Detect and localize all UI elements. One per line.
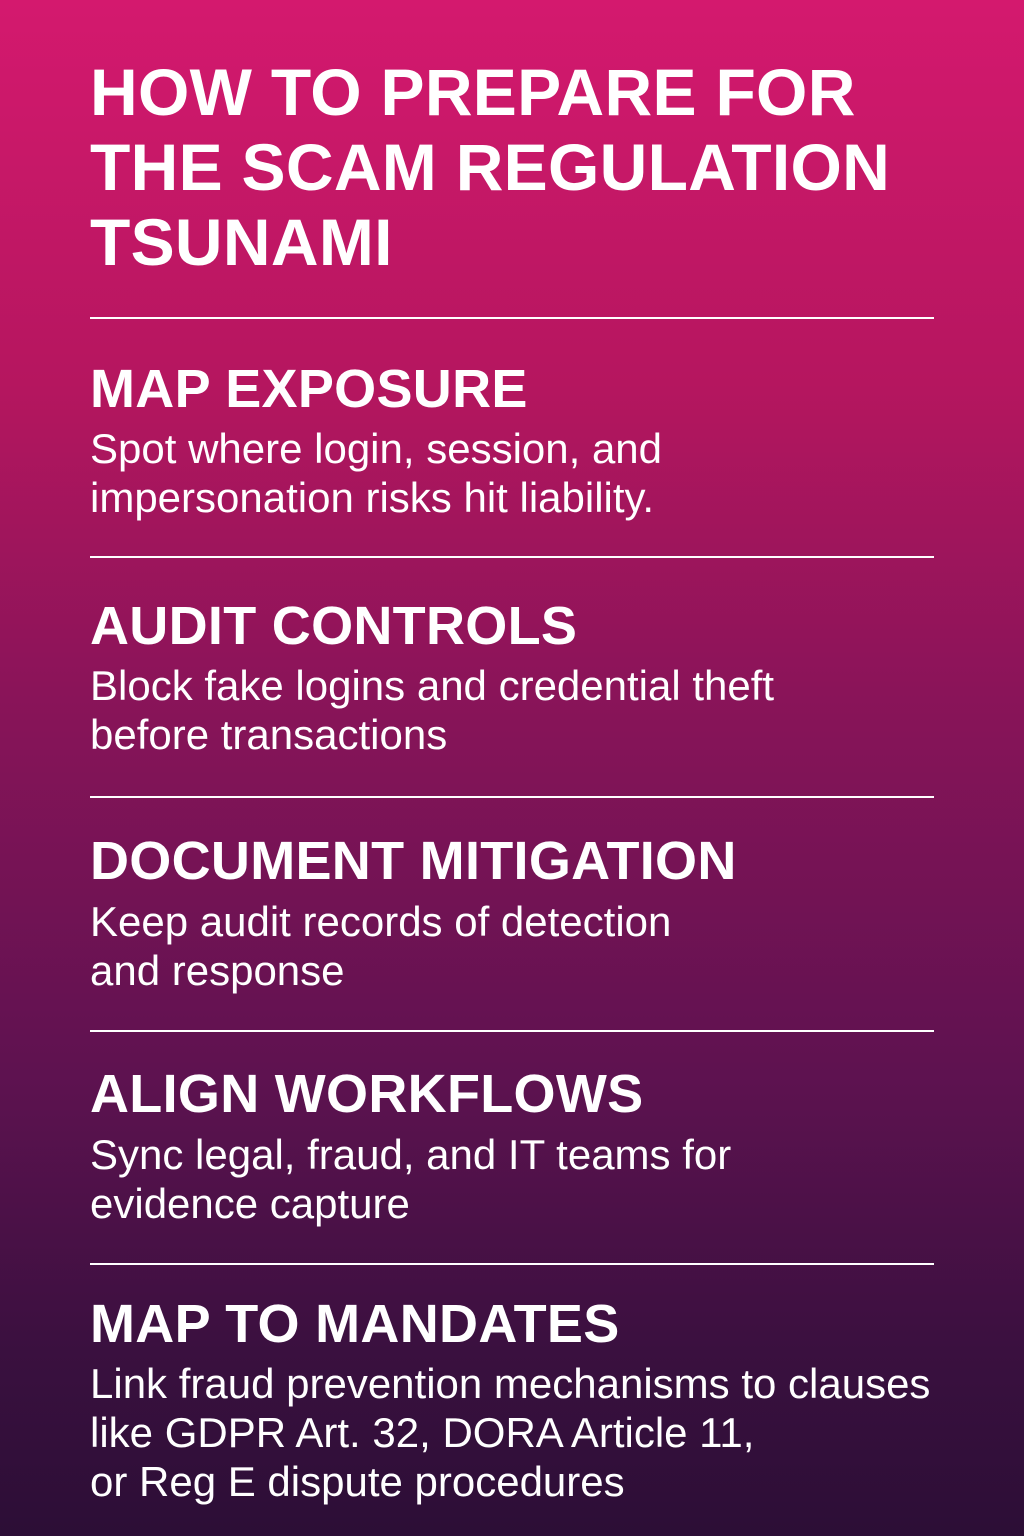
heading: audit controls: AUDIT CONTROLS <box>90 596 577 656</box>
text: align workflows: evidence capture <box>90 1180 410 1227</box>
heading: map to mandates: MAP TO MANDATES <box>90 1294 620 1354</box>
section: document mitigation <box>90 831 737 994</box>
text: map to mandates <box>90 1360 930 1505</box>
text: document mitigation: and response <box>90 947 345 994</box>
heading: align workflows: ALIGN WORKFLOWS <box>90 1064 643 1124</box>
section: align workflows <box>90 1064 731 1227</box>
heading: document mitigation: DOCUMENT MITIGATION <box>90 831 737 891</box>
text: align workflows <box>90 1131 731 1227</box>
text: map exposure <box>90 425 662 521</box>
text: audit controls: Block fake logins and credential theft <box>90 662 774 709</box>
section: map exposure <box>90 359 662 521</box>
section: audit controls <box>90 596 774 758</box>
title: THE SCAM REGULATION <box>90 130 890 204</box>
title: TSUNAMI <box>90 205 393 279</box>
text: map exposure: impersonation risks hit liability. <box>90 474 654 521</box>
text: map to mandates: Link fraud prevention mechanisms to clauses <box>90 1360 930 1407</box>
text: document mitigation: Keep audit records of detection <box>90 898 671 945</box>
text: map exposure: Spot where login, session, and <box>90 425 662 472</box>
text: map to mandates: like GDPR Art. 32, DORA Article 11, <box>90 1409 754 1456</box>
text: audit controls: before transactions <box>90 711 447 758</box>
title <box>90 55 890 279</box>
title: HOW TO PREPARE FOR <box>90 55 856 129</box>
text: document mitigation <box>90 898 671 994</box>
text: map to mandates: or Reg E dispute procedures <box>90 1458 625 1505</box>
text: align workflows: Sync legal, fraud, and IT teams for <box>90 1131 731 1178</box>
heading: map exposure: MAP EXPOSURE <box>90 359 528 419</box>
text: audit controls <box>90 662 774 758</box>
section: map to mandates <box>90 1294 930 1505</box>
